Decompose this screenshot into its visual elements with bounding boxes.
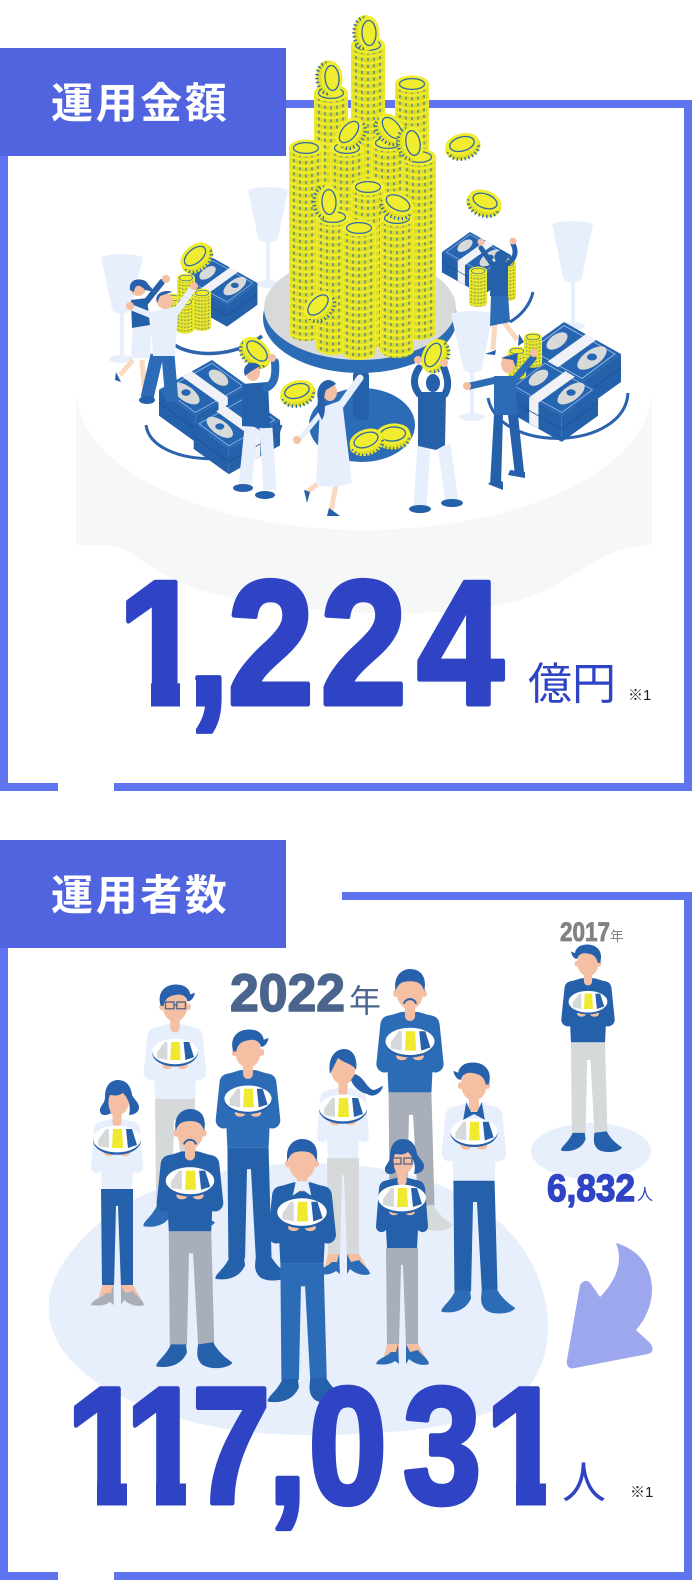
person: woman, far left	[91, 1080, 144, 1306]
glass in front of pedestal	[451, 311, 493, 421]
small coin piles	[163, 258, 542, 380]
table cloth	[76, 250, 652, 613]
section: 運用者数	[0, 840, 692, 1580]
person: centre man	[268, 1139, 345, 1403]
value: 1,224 億円: ※1	[628, 687, 651, 704]
value: 117,031人	[74, 1384, 653, 1532]
value: 1,224 億円: 1,224	[118, 545, 504, 742]
person: woman with ponytail	[317, 1049, 383, 1275]
coin tower	[289, 36, 436, 360]
money stacks	[159, 232, 621, 474]
pedestal base	[263, 256, 457, 462]
person: man in blue, right	[463, 349, 538, 490]
person: man with white shirt and blue trousers	[126, 282, 198, 404]
value: 117,031人: 117,031	[66, 1353, 564, 1539]
value: 6,832人: 人	[637, 1187, 653, 1204]
coins on top of the tower and flying	[174, 15, 506, 461]
person: man, right, white top	[441, 1062, 515, 1314]
label: 2017年: 年	[610, 929, 624, 944]
blob behind 2022 crowd	[49, 1163, 548, 1435]
value: 6,832人: 6,832	[547, 1168, 635, 1210]
frame: amount panel border	[0, 100, 692, 791]
heading tab: 運用金額	[0, 48, 286, 156]
panel: 2017 comparison	[531, 917, 653, 1210]
value: 117,031人: 人	[562, 1459, 606, 1508]
person: man in navy lifting a coin	[409, 356, 463, 513]
person: man in navy with white trousers, left	[233, 354, 276, 499]
person: woman with white skirt	[115, 275, 170, 400]
crowd of 2022	[91, 969, 515, 1403]
label: 2022年: 2022	[230, 964, 345, 1023]
wine glasses	[101, 187, 593, 363]
label: 2022年: 年	[349, 983, 381, 1019]
arcs: money platforms	[146, 292, 628, 459]
person: woman in white dress	[293, 378, 360, 516]
frame: users panel border	[0, 892, 692, 1580]
ellipse under 2017 person	[531, 1123, 651, 1179]
illustration: table with coins and people	[76, 15, 652, 613]
value: 1,224 億円	[126, 578, 651, 734]
value: 117,031人: ※1	[630, 1484, 653, 1501]
heading tab: 運用金額: 運用金額	[51, 80, 229, 127]
heading tab: 運用者数	[0, 840, 286, 948]
person: 2017 man	[561, 945, 622, 1152]
person: tall man with mustache	[376, 969, 453, 1231]
person: woman with glasses	[376, 1139, 429, 1365]
value: 1,224 億円: 億円	[528, 660, 616, 709]
person: man in blue	[215, 1029, 289, 1281]
heading tab: 運用者数: 運用者数	[51, 872, 229, 919]
person: woman in blue skirt, right	[478, 238, 524, 355]
person: man with mustache, navy top	[156, 1109, 232, 1368]
arrow: growth from 2017 to 2022	[567, 1243, 653, 1368]
person: glasses, white top	[143, 984, 215, 1228]
section: 運用金額	[0, 15, 692, 791]
label: 2017年: 2017	[560, 917, 610, 947]
